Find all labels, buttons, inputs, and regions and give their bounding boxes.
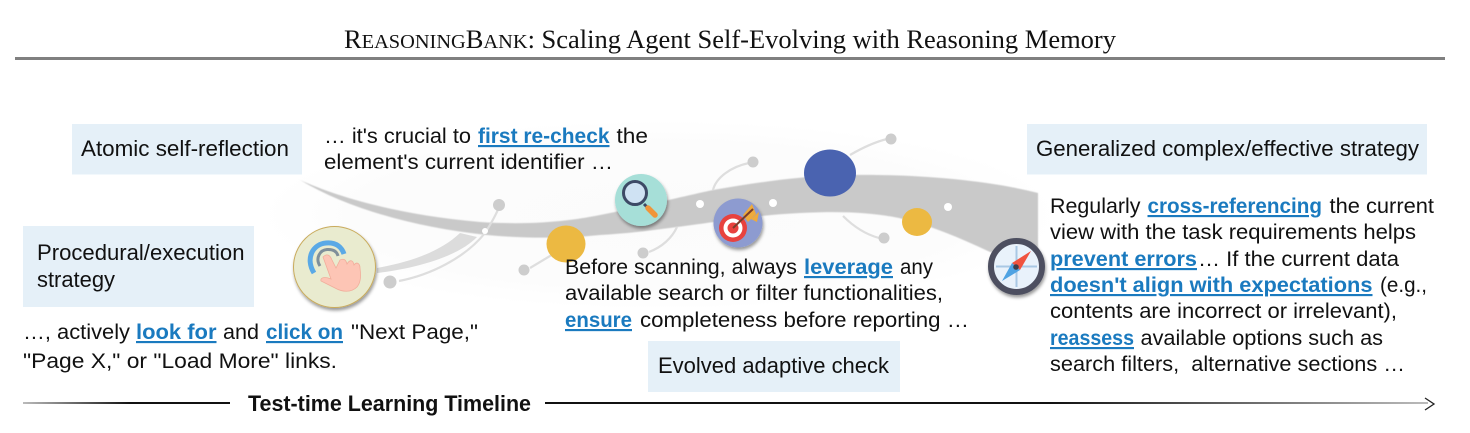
label box: evolved adaptive check: [648, 341, 900, 392]
text block: cross-referencing: [1050, 194, 1434, 376]
text block: cross-referencing: contents are incorrect or irrelevant),: [1050, 299, 1397, 323]
label box: procedural strategy: strategy: [37, 267, 115, 292]
label box: procedural strategy: [23, 226, 254, 307]
connector curves: [399, 139, 887, 281]
title: REASONINGBANK: Scaling Agent Self-Evolving with Reasoning Memory: [344, 25, 1116, 54]
text block: cross-referencing: … If the current data: [1198, 247, 1399, 271]
text block: first re-check: first re-check: [478, 124, 610, 148]
text block: first re-check: [324, 124, 648, 174]
text block: first re-check: the: [616, 124, 648, 148]
label box: atomic self-reflection: [72, 124, 302, 174]
timeline label: Test-time Learning Timeline: [248, 391, 531, 416]
icon: compass: [991, 241, 1042, 292]
text block: look for and click on: …, actively: [23, 320, 130, 344]
text block: cross-referencing: Regularly: [1050, 194, 1141, 218]
main grey ribbon: [300, 175, 1038, 252]
text block: leverage: [565, 255, 969, 332]
text block: leverage: leverage: [804, 255, 893, 279]
label box: generalized strategy: [1027, 124, 1427, 174]
yellow node left: [546, 226, 586, 262]
header rule: [15, 57, 1445, 60]
text block: look for and click on: [23, 320, 478, 373]
text block: look for and click on: "Page X," or "Load More" links.: [23, 349, 337, 373]
text block: look for and click on: look for: [136, 320, 217, 344]
ribbon background illustration: [260, 120, 1060, 310]
label box: generalized strategy: Generalized complex/effective strategy: [1036, 136, 1419, 161]
text block: look for and click on: "Next Page,": [351, 320, 478, 344]
text block: cross-referencing: (e.g.,: [1380, 273, 1427, 297]
text block: leverage: completeness before reporting …: [640, 308, 969, 332]
text block: cross-referencing: reassess: [1050, 326, 1134, 350]
text block: look for and click on: and: [223, 320, 259, 344]
text block: first re-check: … it's crucial to: [324, 124, 471, 148]
text block: first re-check: element's current identifier …: [324, 150, 613, 174]
grey node dots: [384, 134, 896, 288]
label box: atomic self-reflection: Atomic self-reflection: [81, 136, 289, 161]
text block: leverage: Before scanning, always: [565, 255, 797, 279]
label box: evolved adaptive check: Evolved adaptive check: [658, 353, 890, 378]
text block: cross-referencing: the current: [1330, 194, 1434, 218]
timeline arrow: [23, 391, 1434, 416]
icon: target: [714, 198, 762, 248]
blue node: [804, 150, 856, 196]
text block: cross-referencing: view with the task requirements helps: [1050, 220, 1416, 244]
text block: cross-referencing: cross-referencing: [1148, 194, 1322, 218]
text block: cross-referencing: search filters, alternative sections …: [1050, 352, 1405, 376]
label box: procedural strategy: Procedural/execution: [37, 240, 244, 265]
text block: cross-referencing: prevent errors: [1050, 247, 1197, 271]
white node dots: [482, 199, 952, 234]
icon: hand tap: [294, 226, 376, 308]
text block: cross-referencing: doesn't align with expectations: [1050, 273, 1373, 297]
text block: look for and click on: click on: [266, 320, 343, 344]
secondary light ribbon: [377, 233, 477, 273]
text block: leverage: available search or filter functionalities,: [565, 281, 943, 305]
text block: cross-referencing: available options such as: [1140, 326, 1383, 350]
yellow node right: [902, 208, 932, 236]
text block: leverage: ensure: [565, 308, 632, 332]
icon: magnifier: [615, 174, 667, 226]
text block: leverage: any: [900, 255, 933, 279]
